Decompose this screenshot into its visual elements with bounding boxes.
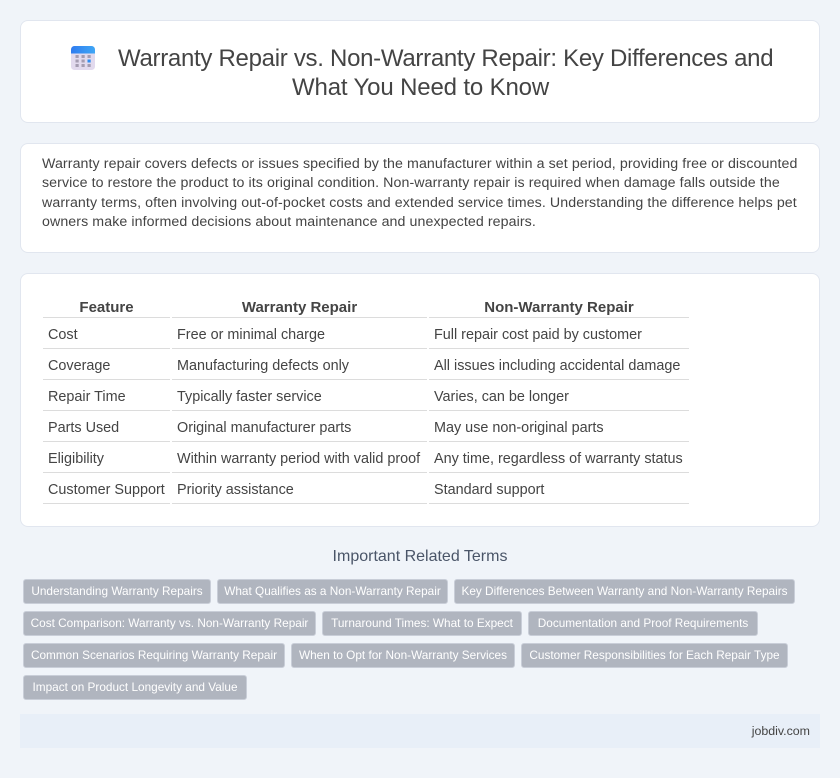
footer source text: jobdiv.com <box>752 724 810 738</box>
comparison table <box>43 299 689 504</box>
text: Warranty Repair vs. Non-Warranty Repair: Key Differences and <box>118 45 773 72</box>
text block: introduction: owners make informed decisions about maintenance and unexpected repairs. <box>42 214 536 230</box>
related term tags: Cost Comparison: Warranty vs. Non-Warranty Repair <box>31 616 308 630</box>
comparison table: Any time, regardless of warranty status <box>434 451 683 467</box>
text block: introduction: Warranty repair covers defects or issues specified by the manufacturer within a set period, providing free or discounted <box>42 156 797 172</box>
comparison table: Parts Used <box>48 420 119 436</box>
comparison table: Free or minimal charge <box>177 327 325 343</box>
related term tags: Common Scenarios Requiring Warranty Repair <box>31 648 277 662</box>
comparison table: Warranty Repair <box>242 299 357 316</box>
icon: calendar <box>71 46 95 70</box>
comparison table: Non-Warranty Repair <box>484 299 634 316</box>
related term tags: Impact on Product Longevity and Value <box>32 680 238 694</box>
panel: introduction <box>20 143 820 253</box>
text block: introduction: service to restore the product to its original condition. Non-warranty repair is required when damage falls outside the <box>42 175 780 191</box>
related term tags <box>23 579 795 700</box>
related term tags: Key Differences Between Warranty and Non-Warranty Repairs <box>461 584 788 598</box>
text block: introduction: warranty terms, often involving out-of-pocket costs and extended service times. Understanding the difference helps pet <box>42 195 797 211</box>
comparison table: Full repair cost paid by customer <box>434 327 642 343</box>
comparison table: Customer Support <box>48 482 165 498</box>
comparison table: Repair Time <box>48 389 126 405</box>
heading: important related terms: Important Related Terms <box>333 548 507 565</box>
comparison table: Typically faster service <box>177 389 322 405</box>
comparison table: Cost <box>48 327 78 343</box>
text block: introduction <box>42 156 797 230</box>
comparison table: Manufacturing defects only <box>177 358 349 374</box>
related term tags: Understanding Warranty Repairs <box>31 584 203 598</box>
comparison table: Varies, can be longer <box>434 389 569 405</box>
text: What You Need to Know <box>292 74 549 101</box>
related term tags: When to Opt for Non-Warranty Services <box>299 648 507 662</box>
related term tags: Turnaround Times: What to Expect <box>331 616 513 630</box>
footer bar <box>20 714 820 748</box>
comparison table: Feature <box>79 299 134 316</box>
comparison table: Original manufacturer parts <box>177 420 351 436</box>
comparison table: Priority assistance <box>177 482 294 498</box>
comparison table: Eligibility <box>48 451 104 467</box>
comparison table: May use non-original parts <box>434 420 604 436</box>
panel: comparison table <box>20 273 820 527</box>
comparison table: All issues including accidental damage <box>434 358 680 374</box>
related term tags: Customer Responsibilities for Each Repair Type <box>529 648 780 662</box>
related term tags: Documentation and Proof Requirements <box>538 616 748 630</box>
comparison table: Coverage <box>48 358 110 374</box>
related term tags: What Qualifies as a Non-Warranty Repair <box>224 584 441 598</box>
comparison table: Standard support <box>434 482 544 498</box>
comparison table: Within warranty period with valid proof <box>177 451 420 467</box>
panel: title header <box>20 20 820 123</box>
title <box>118 45 773 101</box>
